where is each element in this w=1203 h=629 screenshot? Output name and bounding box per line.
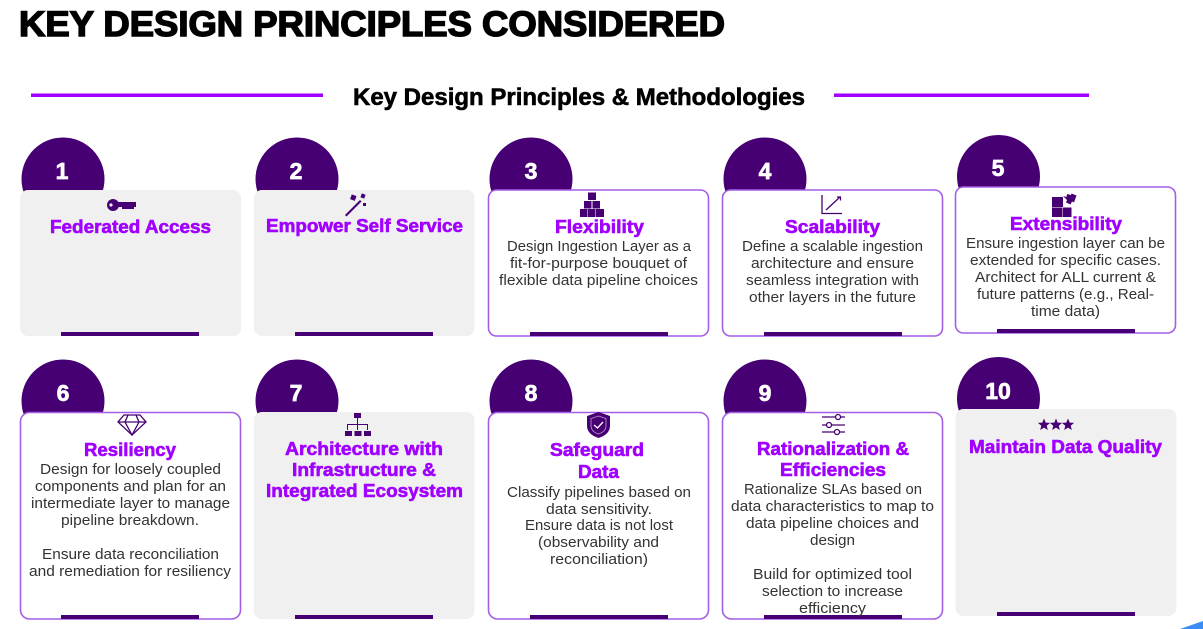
- icon: sliders: [822, 414, 845, 434]
- body text: other layers in the future: [749, 290, 916, 306]
- heading: [757, 438, 909, 480]
- body text: extended for specific cases.: [970, 253, 1161, 269]
- body text: Rationalize SLAs based on: [744, 482, 922, 498]
- heading: Integrated Ecosystem: [266, 480, 463, 501]
- panel: 10 Maintain Data Quality: [956, 357, 1176, 616]
- icon: magic wand: [345, 193, 366, 216]
- body text: [499, 239, 698, 289]
- body text: Ensure data is not lost: [525, 518, 673, 534]
- icon: three stars: [1038, 418, 1074, 430]
- heading: [550, 439, 644, 482]
- panel: 2 Empower Self Service: 2: [290, 158, 302, 184]
- body text: time data): [1031, 304, 1100, 320]
- body text: data pipeline choices and: [746, 516, 919, 532]
- panel: 5 Extensibility: [956, 135, 1176, 333]
- body text: future patterns (e.g., Real-: [977, 287, 1154, 303]
- panel: 6 Resiliency: Resiliency: [84, 439, 177, 460]
- panel: 7 Architecture with Infrastructure & Integrated Ecosystem: [254, 360, 474, 619]
- panel: 2 Empower Self Service: [254, 138, 474, 336]
- body text: Build for optimized tool: [753, 567, 912, 583]
- body text: selection to increase: [762, 584, 903, 600]
- panel: 4 Scalability: Scalability: [785, 216, 881, 237]
- panel: 3 Flexibility: Flexibility: [555, 216, 645, 237]
- panel: 8 Safeguard Data: [488, 360, 708, 619]
- panel: 1 Federated Access: Federated Access: [50, 216, 211, 237]
- panel: 3 Flexibility: [488, 138, 708, 336]
- panel: 3 Flexibility: 3: [525, 158, 537, 184]
- body text: [742, 239, 923, 306]
- body text: Architect for ALL current &: [975, 270, 1156, 286]
- heading: Safeguard: [550, 439, 644, 460]
- heading: Rationalization &: [757, 438, 909, 459]
- panel: 7 Architecture with Infrastructure & Integrated Ecosystem: 7: [290, 380, 302, 406]
- icon: key: [107, 199, 136, 211]
- heading: Infrastructure &: [292, 459, 436, 480]
- panel: 8 Safeguard Data: 8: [525, 380, 538, 406]
- panel: 6 Resiliency: 6: [57, 380, 69, 406]
- heading: Architecture with: [285, 438, 443, 459]
- icon: stacked blocks: [580, 192, 604, 217]
- icon: hierarchy: [345, 413, 371, 436]
- panel: 6 Resiliency: [20, 360, 240, 619]
- body text: intermediate layer to manage: [31, 496, 230, 512]
- panel: 1 Federated Access: [20, 138, 241, 336]
- body text: data sensitivity.: [546, 502, 652, 518]
- body text: [29, 462, 232, 580]
- body text: fit-for-purpose bouquet of: [510, 256, 688, 272]
- heading: Data: [578, 461, 620, 482]
- heading: [266, 438, 463, 501]
- panel: 4 Scalability: 4: [759, 158, 772, 184]
- body text: Design for loosely coupled: [40, 462, 221, 478]
- body text: architecture and ensure: [751, 256, 914, 272]
- body text: Design Ingestion Layer as a: [507, 239, 692, 255]
- section heading with rules: Key Design Principles & Methodologies: [353, 84, 805, 111]
- body text: Define a scalable ingestion: [742, 239, 923, 255]
- body text: flexible data pipeline choices: [499, 273, 698, 289]
- panel: 9 Rationalization & Efficiencies: [722, 360, 942, 619]
- panel: 10 Maintain Data Quality: Maintain Data Quality: [969, 436, 1163, 457]
- body text: efficiency: [799, 601, 867, 617]
- body text: Classify pipelines based on: [507, 485, 691, 501]
- section heading with rules: [31, 84, 1089, 111]
- panel: 5 Extensibility: 5: [992, 155, 1005, 181]
- body text: [966, 236, 1165, 320]
- icon: growth chart: [822, 195, 842, 214]
- body text: (observability and: [538, 535, 659, 551]
- body text: [507, 485, 691, 568]
- panel: 5 Extensibility: Extensibility: [1010, 213, 1123, 234]
- body text: design: [810, 533, 855, 549]
- panel: 2 Empower Self Service: Empower Self Service: [266, 215, 463, 236]
- panel: 10 Maintain Data Quality: 10: [985, 378, 1011, 404]
- icon: gem: [118, 415, 146, 435]
- body text: and remediation for resiliency: [29, 564, 232, 580]
- body text: Ensure data reconciliation: [42, 547, 219, 563]
- panel: 9 Rationalization & Efficiencies: 9: [759, 380, 771, 406]
- body text: [731, 482, 934, 617]
- body text: data characteristics to map to: [731, 499, 934, 515]
- icon: puzzle pieces: [1052, 194, 1076, 217]
- panel: 1 Federated Access: 1: [56, 158, 69, 184]
- body text: seamless integration with: [746, 273, 919, 289]
- body text: components and plan for an: [35, 479, 226, 495]
- body text: reconciliation): [550, 552, 648, 568]
- icon: shield: [587, 412, 610, 438]
- heading: Efficiencies: [780, 459, 886, 480]
- panel: 4 Scalability: [722, 138, 942, 336]
- body text: pipeline breakdown.: [61, 513, 199, 529]
- body text: Ensure ingestion layer can be: [966, 236, 1165, 252]
- title: KEY DESIGN PRINCIPLES CONSIDERED: [19, 5, 725, 44]
